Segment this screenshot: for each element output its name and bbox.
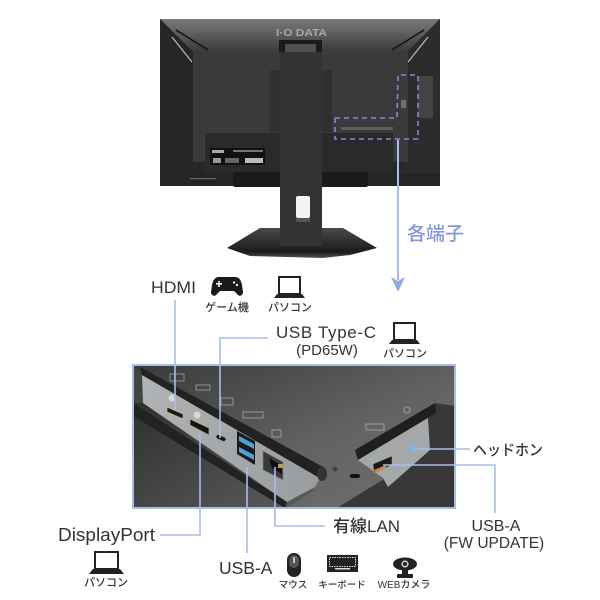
label: keyboard: キーボード	[318, 580, 366, 591]
label: USB-A FW update: USB-A	[472, 518, 521, 535]
rating label	[210, 148, 265, 165]
label: PC: パソコン	[383, 347, 427, 360]
label: ports: 各端子	[407, 223, 464, 245]
label: web camera: WEBカメラ	[378, 579, 430, 591]
USB-C	[216, 434, 226, 442]
label: mouse: マウス	[279, 580, 307, 591]
port close-up photo	[133, 365, 455, 508]
icon: laptop	[389, 323, 420, 344]
headphone jack	[410, 446, 416, 452]
stand	[227, 40, 377, 258]
dashed port area	[335, 75, 418, 139]
label: USB-A FW update: (FW UPDATE)	[444, 535, 544, 552]
leader lines	[160, 300, 495, 553]
icon: laptop	[274, 277, 305, 298]
label: HDMI: HDMI	[151, 278, 196, 297]
port markings	[170, 374, 410, 437]
monitor rear photo	[160, 19, 440, 258]
DisplayPort	[190, 419, 209, 435]
label: headphone: ヘッドホン	[473, 442, 543, 459]
HDMI port	[167, 407, 183, 419]
logo: I·O DATA	[276, 27, 327, 39]
label: USB Type-C: USB Type-C	[276, 323, 376, 342]
icon: laptop	[89, 552, 124, 574]
USB-A stack	[237, 431, 255, 465]
USB-A update port	[373, 456, 392, 473]
label: PC: パソコン	[84, 576, 128, 589]
label: USB-A: USB-A	[219, 558, 273, 578]
icon: web camera	[393, 558, 417, 578]
label: PD65W: (PD65W)	[296, 342, 358, 359]
label: PC: パソコン	[268, 301, 312, 314]
label: USB-A FW update	[444, 518, 544, 552]
label: wired LAN: 有線LAN	[333, 517, 400, 536]
arrow to ports	[391, 140, 405, 292]
icon: game controller	[211, 277, 243, 296]
port screws	[168, 394, 174, 402]
icon: keyboard	[327, 555, 358, 572]
label: game console: ゲーム機	[205, 300, 249, 314]
faint port cover	[418, 76, 433, 118]
icon: mouse	[287, 553, 301, 577]
label: DisplayPort: DisplayPort	[58, 525, 155, 545]
LAN port	[263, 451, 283, 480]
